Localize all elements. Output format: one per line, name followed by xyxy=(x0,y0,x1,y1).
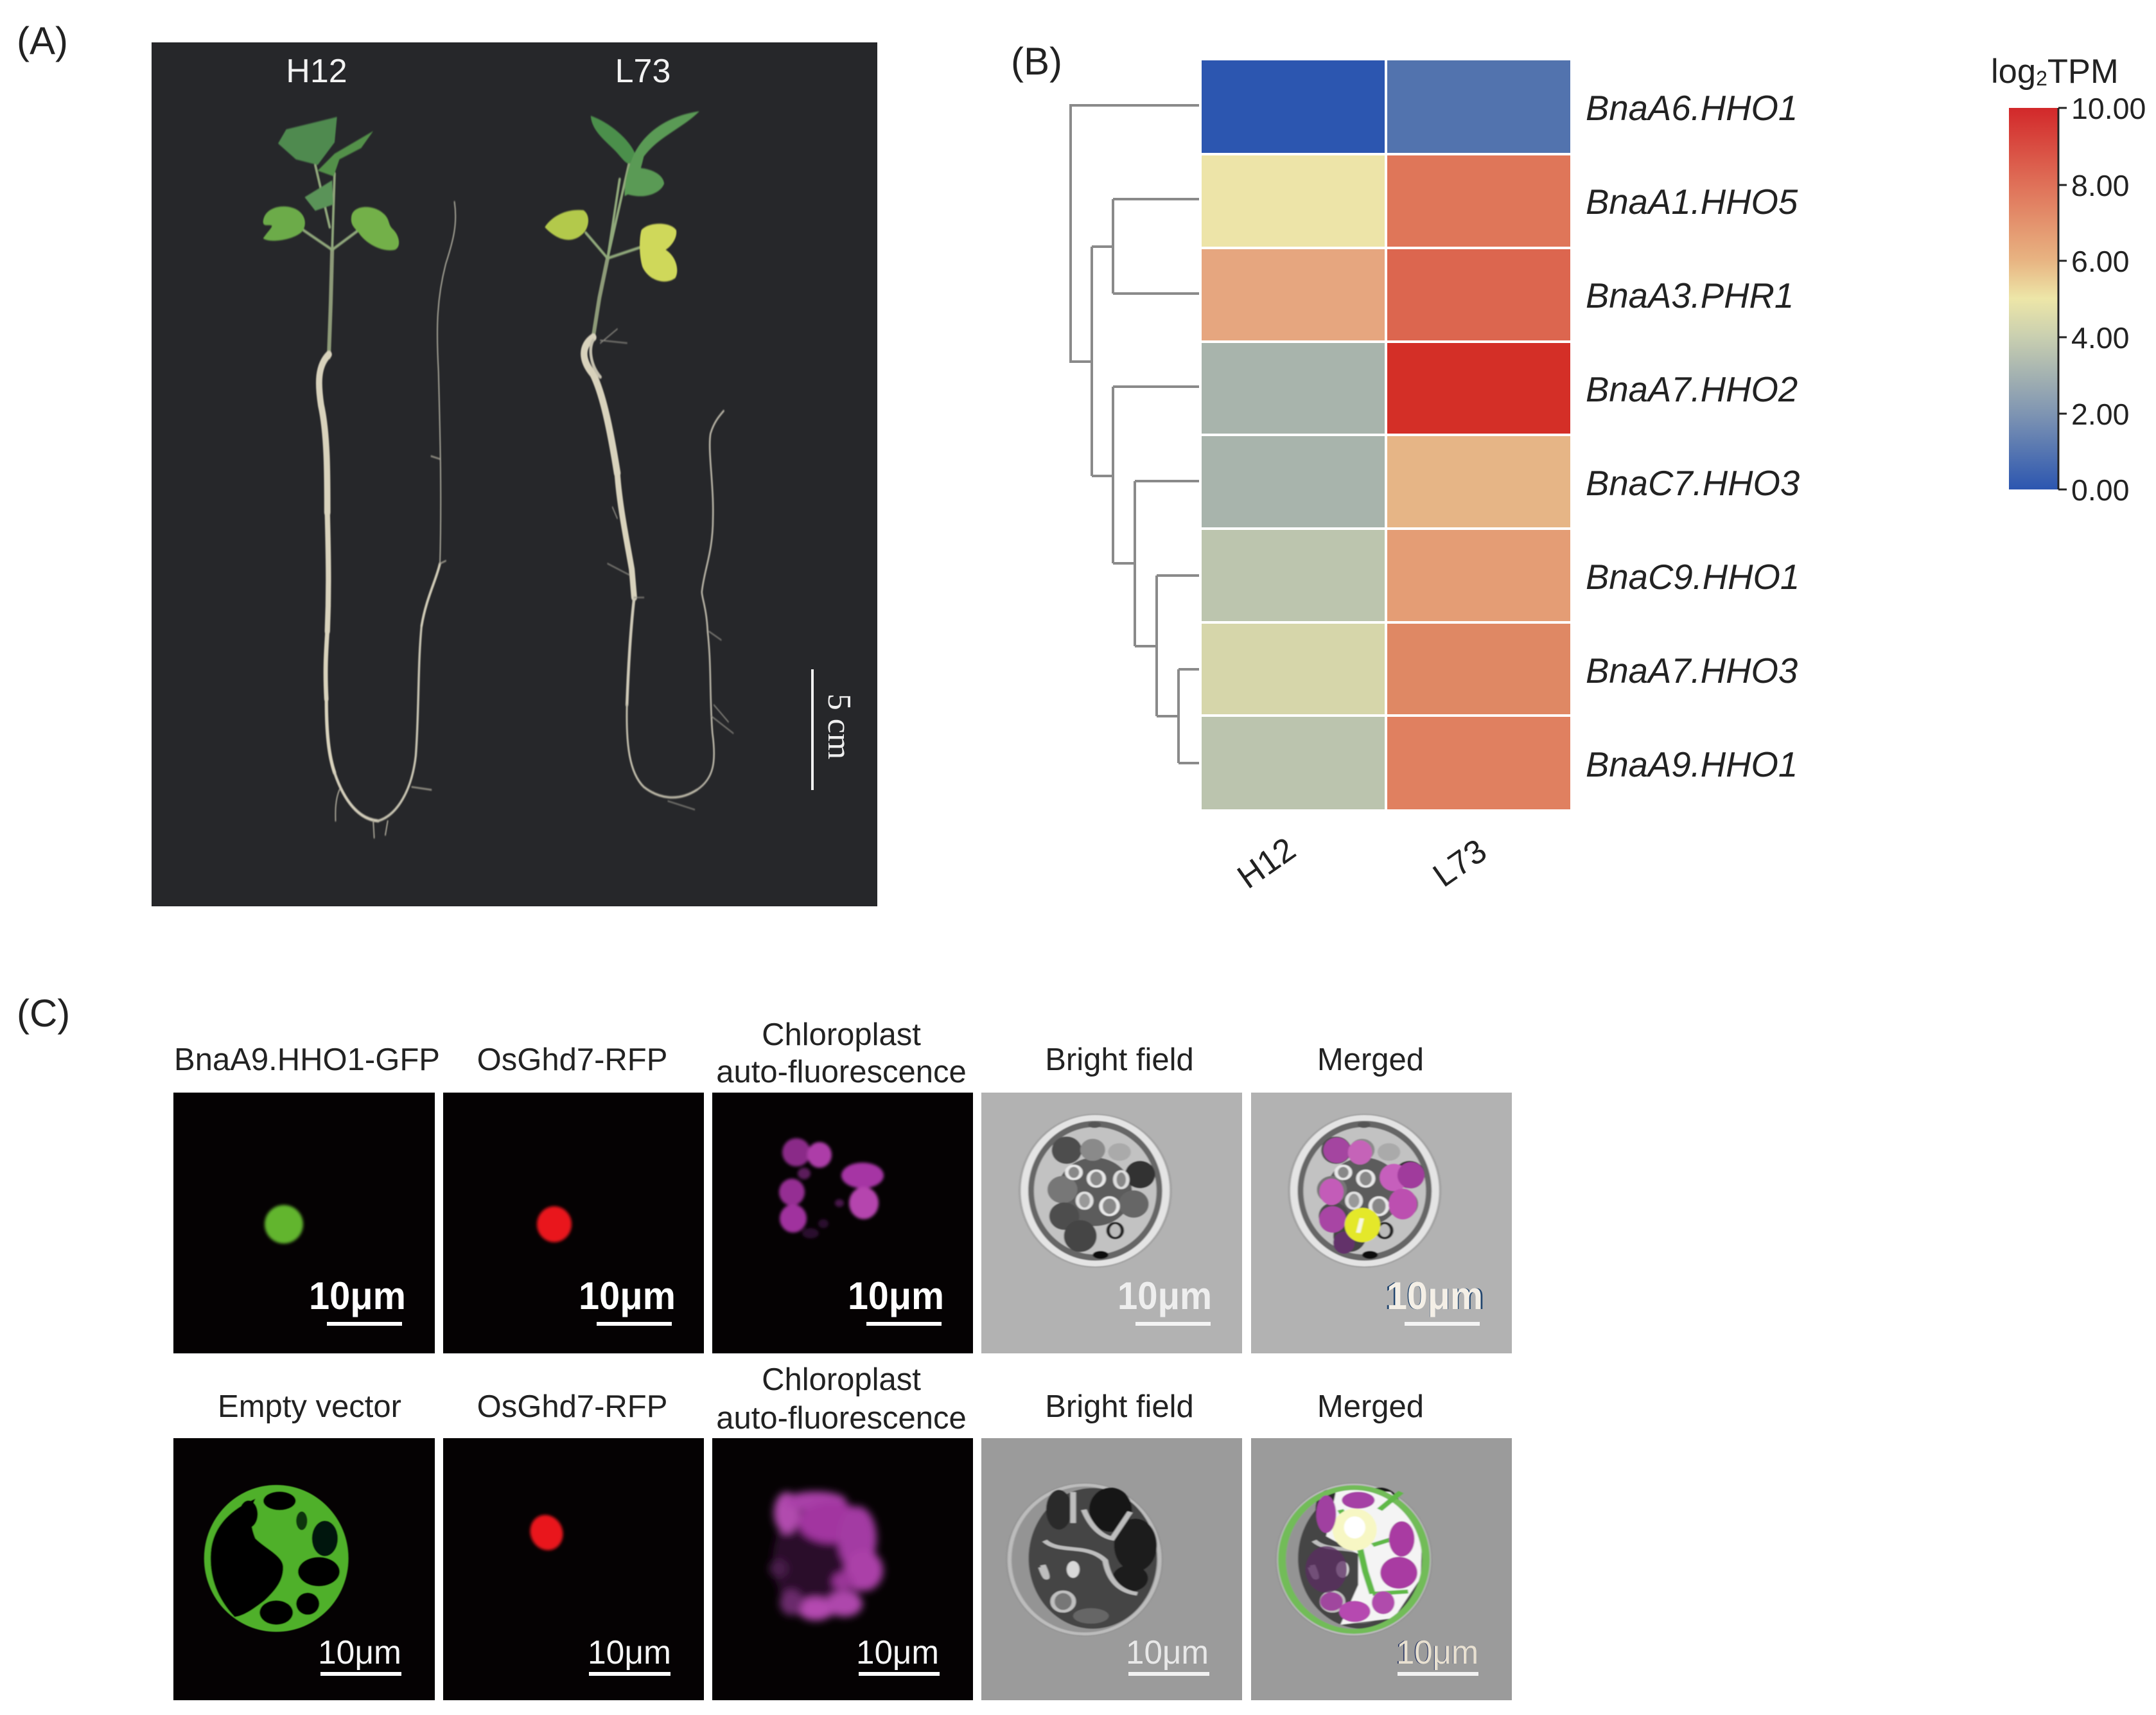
colour bar tick labels: 4.00 xyxy=(2071,321,2130,355)
heatmap gene labels: BnaC9.HHO1 xyxy=(1586,558,1800,597)
heatmap gene labels: BnaA3.PHR1 xyxy=(1586,276,1794,315)
microscopy captions, row 1: auto-fluorescence xyxy=(716,1055,967,1089)
micrograph row 1: bright field: 10μm xyxy=(1117,1274,1212,1317)
heatmap column labels: L73 xyxy=(1426,832,1493,895)
microscopy captions, row 1: Bright field xyxy=(1045,1042,1194,1077)
plant: L73 seedling xyxy=(545,111,733,809)
microscopy captions, row 1 xyxy=(174,1017,1424,1089)
panel label: A: (A) xyxy=(17,19,68,62)
dendrogram xyxy=(1071,105,1199,763)
scale bar: 5 cm: 5 cm xyxy=(821,694,857,759)
micrograph row 2: empty vector GFP xyxy=(173,1438,435,1700)
micrograph row 2: bright field: 10μm xyxy=(1126,1634,1209,1671)
colour bar tick labels xyxy=(2071,92,2146,507)
microscopy captions, row 1: Merged xyxy=(1317,1042,1424,1077)
heatmap column labels xyxy=(1231,831,1493,896)
heatmap xyxy=(1202,60,1570,809)
colour bar xyxy=(2009,108,2058,489)
microscopy captions, row 1: OsGhd7-RFP xyxy=(477,1042,667,1077)
micrograph row 2: empty vector GFP: 10μm xyxy=(318,1634,401,1671)
heatmap gene labels xyxy=(1586,89,1800,784)
colour bar ticks and axis xyxy=(2058,108,2067,489)
micrograph row 1: GFP xyxy=(173,1093,435,1353)
heatmap gene labels: BnaC7.HHO3 xyxy=(1586,464,1800,503)
micrograph row 2: RFP: 10μm xyxy=(588,1634,671,1671)
label: H12: H12 xyxy=(286,53,347,90)
micrograph row 1: merged xyxy=(1251,1093,1512,1353)
micrograph row 2: merged: 10μm xyxy=(1395,1634,1478,1671)
microscopy captions, row 2: Merged xyxy=(1317,1389,1424,1424)
micrograph row 2: chloroplast fluorescence xyxy=(712,1438,973,1700)
micrograph row 1: RFP xyxy=(443,1093,704,1353)
panel label: C: (C) xyxy=(17,992,70,1035)
heatmap gene labels: BnaA7.HHO2 xyxy=(1586,370,1798,409)
colour legend: log2TPM xyxy=(1991,53,2146,507)
panel A: seedling photograph xyxy=(152,42,877,906)
colour bar tick labels: 6.00 xyxy=(2071,245,2130,278)
microscopy captions, row 2: Chloroplast xyxy=(762,1362,921,1397)
micrograph row 2: chloroplast fluorescence: 10μm xyxy=(856,1634,939,1671)
plant: H12 seedling xyxy=(263,117,455,838)
heatmap gene labels: BnaA9.HHO1 xyxy=(1586,745,1798,784)
colour bar tick labels: 2.00 xyxy=(2071,398,2130,431)
heatmap column labels: H12 xyxy=(1231,831,1302,896)
micrograph row 2: merged xyxy=(1251,1438,1512,1700)
microscopy captions, row 2: OsGhd7-RFP xyxy=(477,1389,667,1424)
micrograph row 2: RFP xyxy=(443,1438,704,1700)
micrograph row 1: GFP: 10μm xyxy=(309,1274,406,1317)
micrograph row 1: chloroplast fluorescence: 10μm xyxy=(848,1274,944,1317)
microscopy captions, row 2: auto-fluorescence xyxy=(716,1401,967,1436)
heatmap gene labels: BnaA1.HHO5 xyxy=(1586,182,1798,222)
panel label: B: (B) xyxy=(1011,40,1062,83)
microscopy captions, row 1: Chloroplast xyxy=(762,1017,921,1052)
microscopy captions, row 1: BnaA9.HHO1-GFP xyxy=(174,1042,440,1077)
colour legend: log2TPM: TPM xyxy=(2047,53,2119,91)
micrograph row 1: RFP: 10μm xyxy=(579,1274,676,1317)
scale bar: 5 cm xyxy=(811,669,857,790)
micrograph row 2: merged: 10μm xyxy=(1396,1634,1478,1671)
micrograph row 1: chloroplast fluorescence xyxy=(712,1093,973,1353)
microscopy captions, row 2 xyxy=(218,1362,1424,1436)
micrograph row 1: merged: 10μm xyxy=(1387,1274,1483,1317)
colour bar tick labels: 8.00 xyxy=(2071,169,2130,202)
micrograph row 2: bright field xyxy=(981,1438,1242,1700)
colour legend: log2TPM: log xyxy=(1991,53,2036,91)
micrograph row 1: merged: 10μm xyxy=(1385,1274,1485,1317)
colour bar tick labels: 10.00 xyxy=(2071,92,2146,125)
heatmap gene labels: BnaA7.HHO3 xyxy=(1586,651,1798,690)
micrograph row 1: bright field xyxy=(981,1093,1242,1353)
colour bar tick labels: 0.00 xyxy=(2071,473,2130,507)
label: L73: L73 xyxy=(615,53,670,90)
colour legend: log2TPM: 2 xyxy=(2036,67,2047,90)
microscopy captions, row 2: Empty vector xyxy=(218,1389,401,1424)
heatmap gene labels: BnaA6.HHO1 xyxy=(1586,89,1798,128)
microscopy captions, row 2: Bright field xyxy=(1045,1389,1194,1424)
